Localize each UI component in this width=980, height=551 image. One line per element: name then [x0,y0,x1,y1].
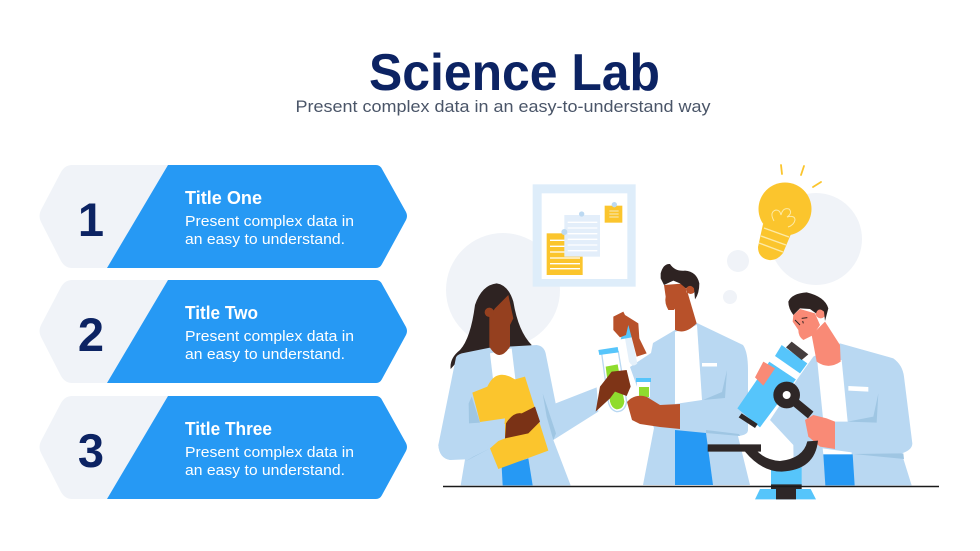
hair [451,283,532,372]
head [485,295,513,355]
subtitle: Present complex data in an easy-to-understand way [296,97,711,116]
folder and arm [438,375,548,469]
illustration: woman scientist [438,283,598,485]
illustration: light bulb [758,165,821,260]
blue banner three [107,396,407,499]
text three: an easy to understand. [185,462,345,479]
panel: item one [40,165,407,268]
blue banner one [107,165,407,268]
number tab three [40,396,170,499]
panel: item two [40,280,407,383]
blue banner two [107,280,407,383]
icon: large test tube [596,347,631,412]
text three: Present complex data in [185,444,354,461]
text two: Present complex data in [185,328,354,345]
heading two: Title Two [185,303,258,323]
number three: 3 [78,424,104,477]
title: Science Lab [369,44,660,102]
head [788,292,841,366]
head [661,264,699,331]
table line [443,486,939,488]
coat and body [438,345,598,485]
illustration: right scientist [770,292,912,485]
icon: microscope [708,342,818,499]
number one: 1 [78,193,104,246]
icon: dropper tube [613,312,647,365]
illustration: middle scientist [613,264,750,485]
number two: 2 [78,308,104,361]
icon: small test tube [637,379,650,397]
heading one: Title One [185,188,262,208]
illustration: pin board [533,184,636,287]
heading three: Title Three [185,419,272,439]
number tab one [40,165,170,268]
number tab two [40,280,170,383]
illustration: backdrop circles [446,193,862,347]
text one: Present complex data in [185,213,354,230]
text two: an easy to understand. [185,346,345,363]
panel: item three [40,396,407,499]
text one: an easy to understand. [185,231,345,248]
